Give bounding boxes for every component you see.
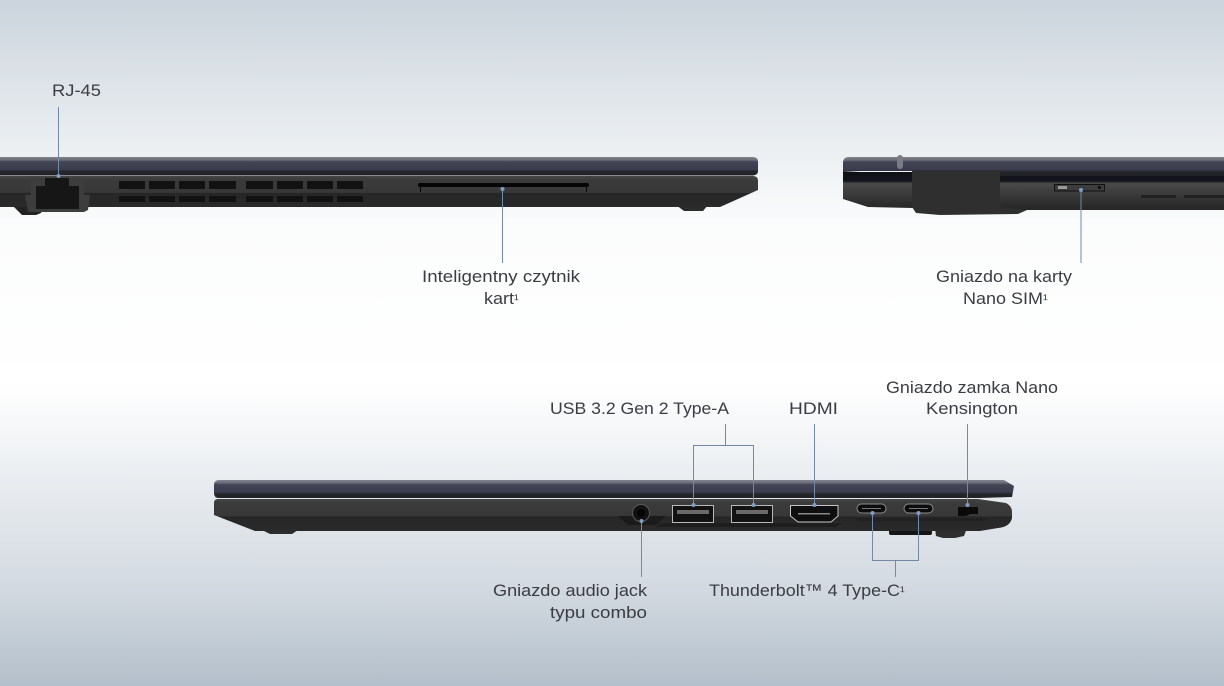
label: smart card reader: kart	[484, 289, 514, 308]
leader: Kensington	[966, 424, 970, 507]
label: Thunderbolt: ¹	[900, 583, 905, 599]
label: RJ-45: RJ-45	[52, 81, 101, 100]
smart card slot	[418, 183, 589, 192]
laptop: ports side view	[214, 480, 1014, 538]
black foot	[889, 528, 932, 535]
leader: card reader	[500, 187, 504, 263]
rear lid	[0, 157, 758, 176]
label: SIM: Nano SIM	[963, 289, 1043, 308]
HDMI port	[790, 506, 838, 522]
leader: HDMI	[812, 424, 816, 507]
label: HDMI: HDMI	[789, 399, 838, 418]
leader: audio	[640, 519, 644, 577]
rear vents	[119, 181, 363, 202]
label: Kensington: Gniazdo zamka Nano	[886, 378, 1058, 397]
rear base	[0, 176, 758, 207]
left foot	[262, 530, 298, 534]
label: Kensington: Kensington	[926, 399, 1018, 418]
label: audio: Gniazdo audio jack	[493, 581, 648, 600]
label: SIM: ¹	[1043, 291, 1048, 307]
USB-A port 2	[732, 506, 772, 522]
audio jack	[618, 504, 666, 525]
port recess	[656, 523, 842, 527]
rear foot right	[676, 205, 708, 211]
side lid	[843, 157, 1224, 176]
label: smart card reader: Inteligentny czytnik	[422, 267, 581, 286]
label: USB: USB 3.2 Gen 2 Type-A	[550, 399, 730, 418]
side vents	[1141, 195, 1224, 198]
label: Thunderbolt: Thunderbolt™ 4 Type-C	[709, 581, 900, 600]
ports lid	[214, 480, 1014, 498]
SIM tray	[1054, 184, 1104, 191]
leader: RJ-45	[56, 107, 60, 178]
lock slot	[958, 507, 978, 516]
RJ-45 port	[25, 178, 90, 212]
laptop: rear view	[0, 157, 758, 215]
laptop: side view with hinge	[843, 155, 1224, 215]
label: SIM: Gniazdo na karty	[936, 267, 1073, 286]
ports base	[214, 499, 1012, 531]
leader: SIM	[1079, 188, 1083, 263]
lid bump	[897, 155, 903, 169]
USB-A port 1	[672, 506, 714, 522]
leader: USB	[692, 424, 756, 507]
Thunderbolt port 2	[904, 504, 933, 513]
Thunderbolt recess	[854, 518, 988, 521]
Thunderbolt port 1	[857, 504, 886, 513]
side base	[843, 172, 1224, 210]
rear foot left	[12, 205, 44, 215]
leader: Thunderbolt	[870, 511, 920, 577]
label: smart card reader: ¹	[514, 291, 519, 307]
hinge	[912, 170, 1027, 215]
grey foot	[935, 528, 967, 538]
label: audio: typu combo	[550, 603, 647, 622]
